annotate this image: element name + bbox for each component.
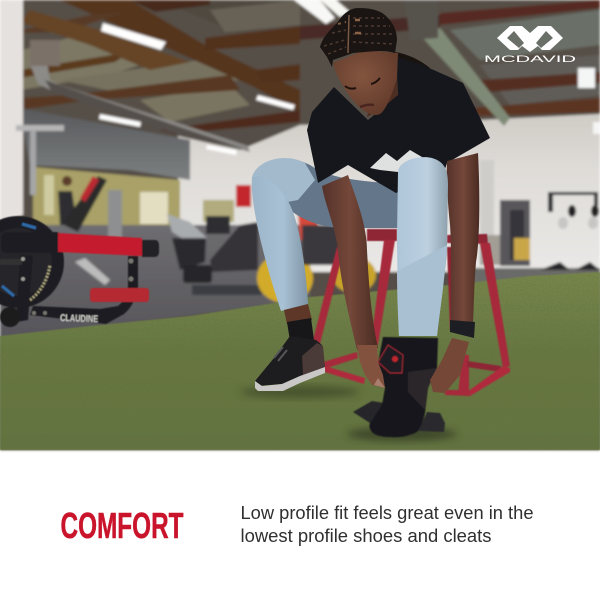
wall bar and bags <box>548 192 598 212</box>
thigh <box>252 159 398 228</box>
sneaker laces <box>274 347 287 361</box>
brace body <box>369 337 438 437</box>
brace mesh side <box>408 368 437 410</box>
ankle brace <box>353 337 445 437</box>
bottom frame <box>323 352 358 369</box>
floor <box>0 225 310 340</box>
red plyo box <box>313 229 510 396</box>
plate brand text <box>30 265 50 300</box>
weight plate <box>0 216 64 308</box>
white right wall <box>178 114 600 272</box>
left arm <box>322 175 378 350</box>
footplate lettering: CLAUDINE <box>60 313 98 325</box>
windows <box>33 167 180 226</box>
red pad <box>58 233 142 256</box>
black pad right end <box>142 240 159 257</box>
shirt logo <box>370 150 422 172</box>
McDavid logo <box>484 26 576 65</box>
ponytail <box>395 52 430 78</box>
turf floor <box>0 270 600 450</box>
corrugated back wall <box>20 108 190 180</box>
hair part and braid highlights <box>324 15 394 54</box>
left rack <box>16 125 64 131</box>
legs <box>313 247 343 344</box>
sneaker sole <box>255 367 325 391</box>
logo M mark <box>497 26 563 52</box>
sneaker heel panel <box>302 343 325 375</box>
heading: comfort: COMFORT <box>60 505 184 546</box>
far bars <box>447 247 457 330</box>
description line 2: lowest profile shoes and cleats <box>240 526 492 546</box>
brace logo <box>392 356 398 362</box>
sneaker upper <box>255 336 325 386</box>
face <box>333 50 398 115</box>
shadows on turf <box>240 386 360 398</box>
neck <box>367 60 398 117</box>
watch <box>450 320 475 338</box>
athlete <box>252 8 490 437</box>
right shin <box>397 157 448 336</box>
right rack <box>480 160 494 260</box>
left hand <box>357 345 385 388</box>
floor bar <box>75 258 110 285</box>
hair braids <box>320 8 397 67</box>
t-shirt <box>307 57 490 193</box>
brace straps <box>353 401 384 423</box>
description line 1: Low profile fit feels great even in the <box>240 503 534 523</box>
black pad end <box>1 232 61 253</box>
yellow plates <box>257 253 313 303</box>
brace patch <box>378 345 403 373</box>
right hand <box>430 338 469 393</box>
left fingernails <box>374 378 385 388</box>
wood beams <box>60 0 300 112</box>
left shin <box>252 177 308 311</box>
ducts <box>29 62 250 152</box>
background red machine <box>62 176 107 232</box>
foreground bench with red pad <box>0 216 159 327</box>
light fixtures <box>101 23 166 50</box>
gym background <box>0 0 600 450</box>
eyes <box>345 78 380 89</box>
mesh panel <box>397 245 447 336</box>
background person <box>58 191 77 225</box>
ceiling panels <box>20 0 600 125</box>
red wall panel <box>236 185 251 207</box>
sock <box>287 318 314 341</box>
red roller <box>90 288 149 302</box>
sneaker <box>255 336 325 391</box>
machines <box>167 214 207 243</box>
bench frame <box>16 255 33 322</box>
right floor strip <box>450 268 600 285</box>
logo wordmark: MCDAVID <box>484 54 576 65</box>
lips <box>360 105 374 107</box>
description text <box>240 503 534 546</box>
caption panel <box>60 503 534 546</box>
panel: gym photo <box>0 0 600 450</box>
white column <box>0 0 23 225</box>
right arm <box>447 153 479 322</box>
left ankle <box>284 304 312 324</box>
